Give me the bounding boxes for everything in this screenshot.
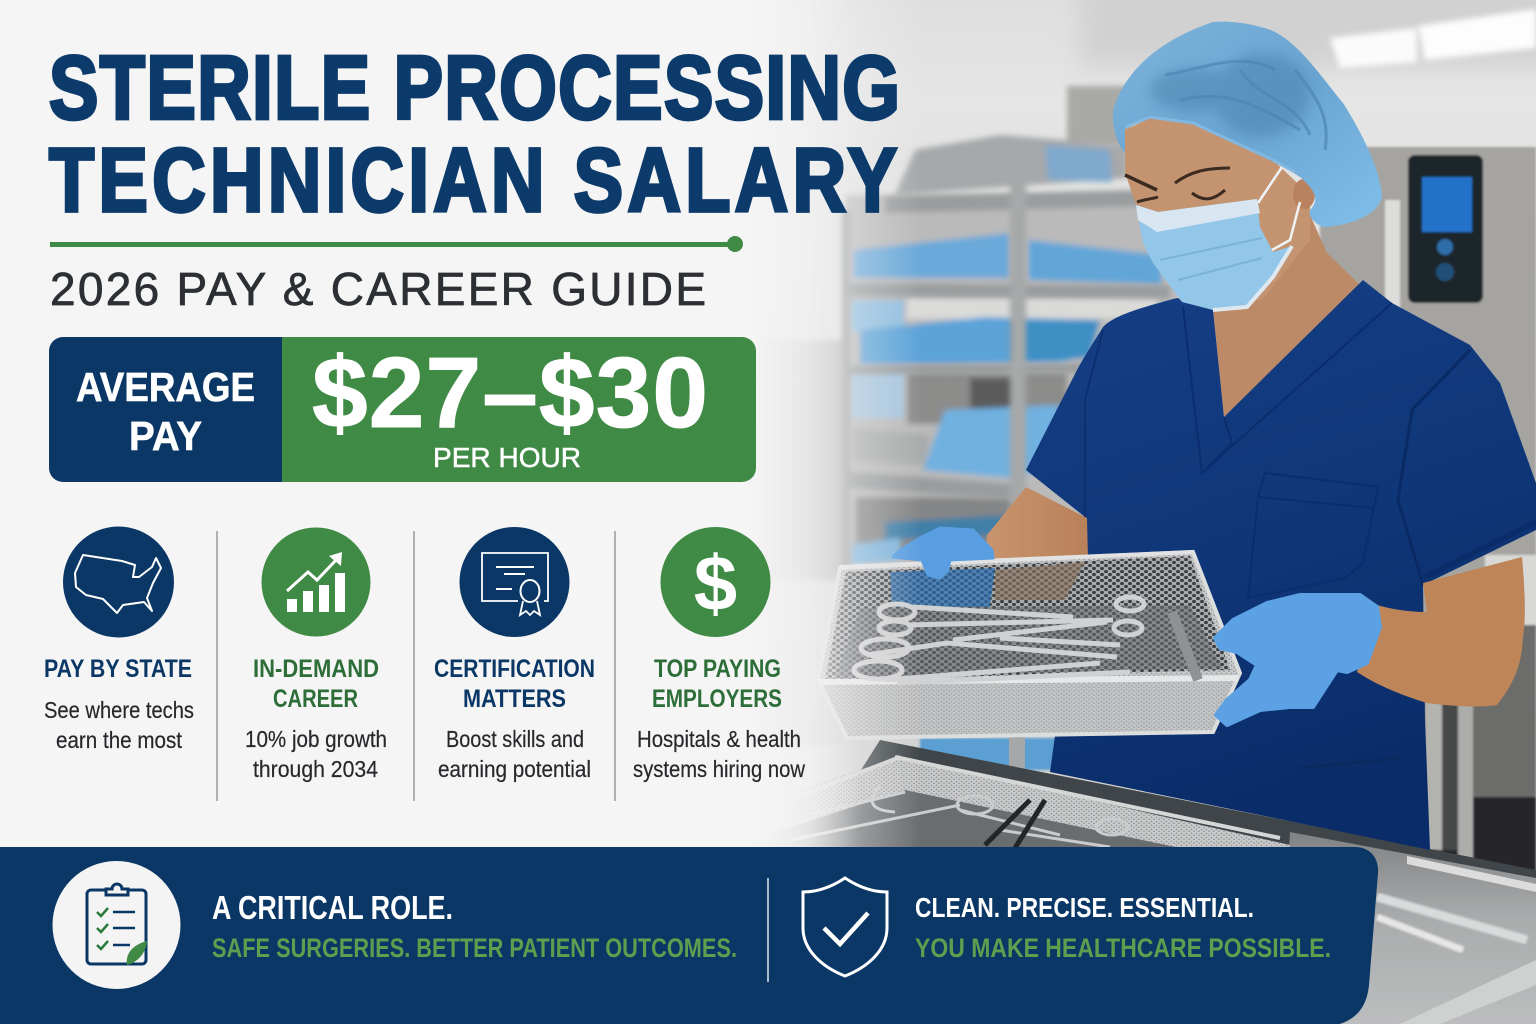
face bbox=[1125, 118, 1310, 300]
clean precise essential text: CLEAN. PRECISE. ESSENTIAL. bbox=[915, 892, 1254, 923]
heading bbox=[652, 655, 782, 713]
description: earning potential bbox=[438, 756, 591, 782]
icon: growth chart bbox=[262, 528, 370, 636]
eyes and brows bbox=[1125, 158, 1305, 202]
heading: PAY BY STATE bbox=[44, 655, 192, 683]
ceiling band and lights bbox=[1080, 0, 1536, 68]
pack behind tray bbox=[920, 738, 1057, 770]
column: pay by state bbox=[44, 526, 194, 753]
icon: dollar sign: $ bbox=[694, 539, 737, 627]
icon: dollar sign bbox=[660, 527, 770, 637]
neck bbox=[1180, 215, 1363, 417]
wire rack with sterile packs bbox=[760, 135, 1180, 771]
average pay badge bbox=[49, 337, 756, 482]
title bbox=[49, 39, 900, 231]
description bbox=[44, 697, 194, 753]
hair net bbox=[1113, 22, 1382, 227]
pay range: $27–$30 bbox=[312, 337, 708, 449]
description bbox=[633, 726, 805, 782]
icon: shield with check bbox=[803, 878, 887, 976]
right gloved hand bbox=[1215, 595, 1380, 725]
green title rule bbox=[50, 236, 743, 252]
clean precise essential text bbox=[915, 892, 1331, 963]
description bbox=[438, 726, 591, 782]
description bbox=[245, 726, 387, 782]
lower fade over tray bbox=[700, 745, 860, 850]
banner divider bbox=[767, 878, 769, 982]
description: systems hiring now bbox=[633, 756, 805, 782]
title: TECHNICIAN SALARY bbox=[49, 131, 897, 231]
left forearm bbox=[985, 487, 1088, 560]
icon: clipboard checklist bbox=[52, 861, 180, 989]
subtitle: 2026 PAY & CAREER GUIDE bbox=[50, 263, 706, 315]
critical role text: A CRITICAL ROLE. bbox=[212, 889, 453, 926]
description: Boost skills and bbox=[446, 726, 584, 752]
right arm bbox=[1357, 557, 1525, 706]
title: STERILE PROCESSING bbox=[49, 39, 900, 138]
heading: IN-DEMAND bbox=[253, 655, 379, 683]
bottom banner bbox=[0, 847, 1378, 1024]
counter and steel table bbox=[700, 740, 1536, 1024]
column: top paying employers bbox=[633, 527, 805, 782]
heading: EMPLOYERS bbox=[652, 685, 782, 713]
icon: US map bbox=[63, 526, 174, 638]
ear bbox=[1293, 179, 1315, 209]
badge label: AVERAGE bbox=[76, 364, 255, 410]
sterilizer machine bbox=[1320, 147, 1536, 872]
description: 10% job growth bbox=[245, 726, 387, 752]
clean precise essential text: YOU MAKE HEALTHCARE POSSIBLE. bbox=[915, 933, 1331, 963]
surgical mask bbox=[1136, 167, 1300, 310]
heading: MATTERS bbox=[463, 685, 566, 713]
heading bbox=[253, 655, 379, 713]
column: in-demand career bbox=[245, 528, 387, 782]
critical role text bbox=[212, 889, 737, 963]
badge label: PAY bbox=[129, 413, 202, 459]
mesh instrument basket bbox=[818, 552, 1240, 738]
description: Hospitals & health bbox=[637, 726, 801, 752]
description: through 2034 bbox=[253, 756, 378, 782]
per hour: PER HOUR bbox=[433, 442, 581, 473]
icon: certificate bbox=[460, 527, 570, 637]
surgical instruments bbox=[854, 597, 1198, 683]
scrubs top bbox=[1026, 280, 1536, 850]
wall cabinet bbox=[1067, 86, 1132, 146]
description: earn the most bbox=[56, 727, 183, 753]
left gloved hand bbox=[893, 528, 993, 578]
heading bbox=[434, 655, 595, 713]
column dividers bbox=[217, 531, 615, 801]
description: See where techs bbox=[44, 697, 194, 723]
heading: TOP PAYING bbox=[654, 655, 781, 683]
heading: CAREER bbox=[273, 685, 358, 713]
lower instrument tray bbox=[700, 757, 1290, 870]
heading: CERTIFICATION bbox=[434, 655, 595, 683]
critical role text: SAFE SURGERIES. BETTER PATIENT OUTCOMES. bbox=[212, 933, 737, 963]
column: certification matters bbox=[434, 527, 595, 782]
badge label bbox=[76, 364, 255, 459]
